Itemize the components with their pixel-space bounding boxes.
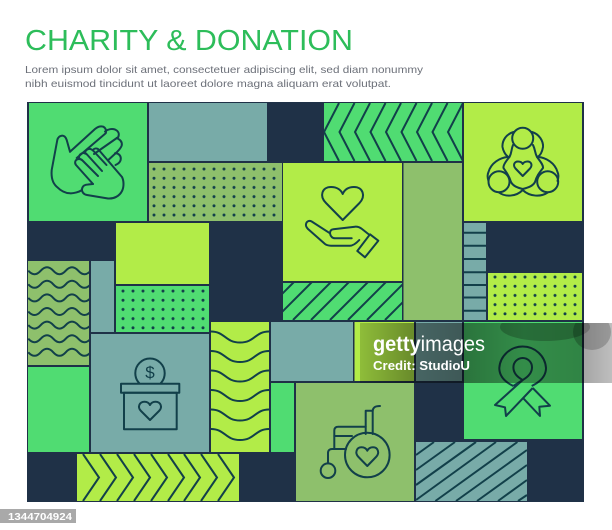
watermark band	[360, 323, 612, 383]
panel: wavy sage tile	[28, 261, 91, 365]
image id tag	[0, 509, 76, 523]
panel: sage wheelchair tile	[296, 383, 414, 501]
panel: teal tile behind watermark	[416, 322, 462, 381]
description text	[25, 64, 424, 90]
watermark credit: Credit: StudioU	[373, 359, 470, 373]
image id tag: 1344704924	[8, 511, 72, 523]
panel: sage column	[404, 163, 462, 320]
title: CHARITY & DONATION	[25, 25, 353, 57]
icon: hand holding heart	[306, 187, 378, 257]
panel: right chevron tile	[77, 454, 239, 501]
panel: teal donation tile	[91, 334, 209, 452]
description text: nibh euismod tincidunt ut laoreet dolore magna aliquam erat volutpat.	[25, 78, 391, 90]
panel: lime tile left	[116, 223, 209, 284]
panel: diagonal teal tile	[416, 442, 527, 501]
panel: green narrow tile	[271, 383, 294, 452]
description text: Lorem ipsum dolor sit amet, consectetuer adipiscing elit, sed diam nonummy	[25, 64, 424, 76]
panel: dotted sage tile	[149, 163, 282, 221]
panel: teal tile centre	[271, 322, 353, 381]
icon: dollar sign: $	[145, 363, 155, 382]
mosaic panel	[27, 102, 584, 502]
panel: lime people tile	[464, 103, 582, 221]
panel: lime hand tile	[283, 163, 402, 281]
panel: ladder stripe tile	[464, 223, 486, 320]
icon: three people around heart	[488, 128, 558, 196]
panel: lime tile centre	[354, 322, 414, 381]
icon: clasped hands	[52, 126, 124, 199]
watermark logo text: gettyimages	[373, 333, 485, 356]
icon: donation box with coin	[121, 359, 179, 429]
panel: left chevron tile	[324, 103, 463, 161]
panel: green ribbon tile	[464, 322, 582, 439]
panel: diagonal green tile	[283, 283, 402, 320]
panel: wavy lime tile	[211, 322, 269, 452]
icon: wheelchair with heart	[321, 406, 390, 478]
panel: teal tile top	[149, 103, 267, 161]
panel: teal thin tile	[91, 261, 114, 332]
panel: dotted lime tile	[488, 273, 582, 320]
icon: awareness ribbon	[495, 347, 550, 416]
panel: green tile left	[28, 367, 89, 452]
panel: dotted green tile	[116, 286, 209, 332]
panel: green hands tile	[29, 103, 147, 221]
